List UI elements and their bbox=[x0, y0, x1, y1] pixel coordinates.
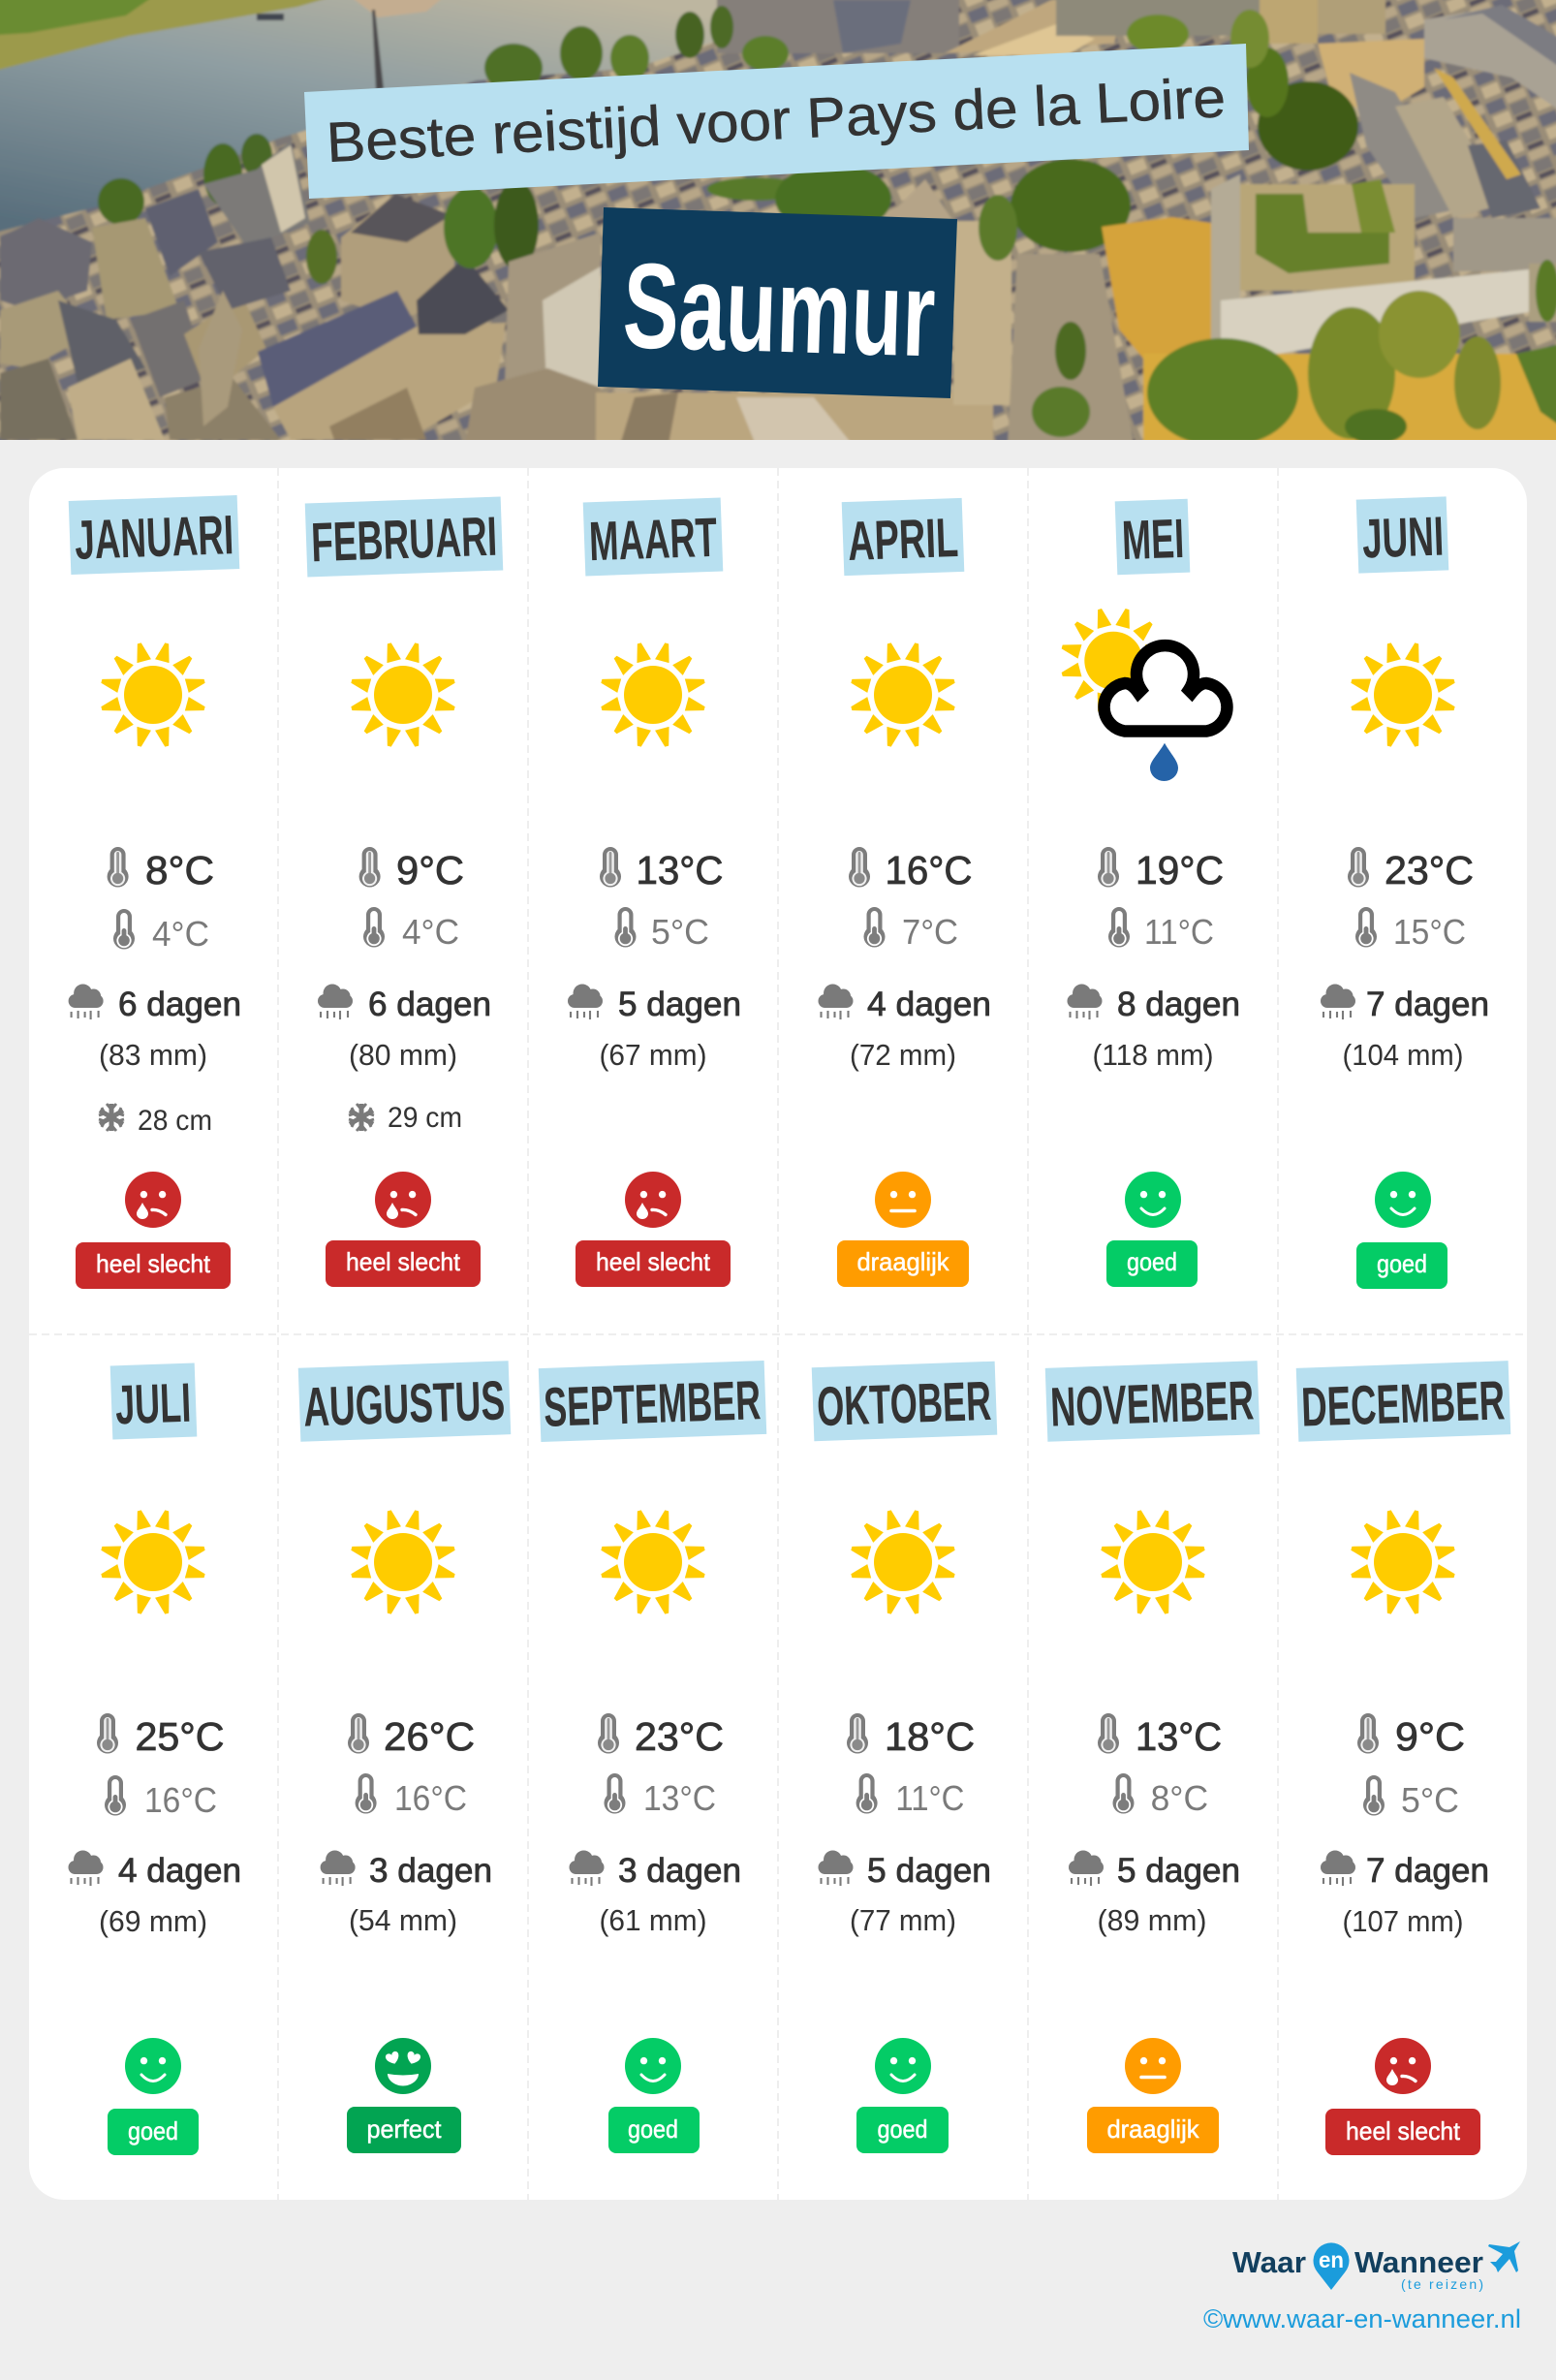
month heading: februari: FEBRUARI bbox=[310, 506, 498, 574]
max temperature: 9°C bbox=[396, 848, 464, 892]
rain days: 4 dagen bbox=[867, 986, 991, 1023]
min temperature bbox=[1108, 907, 1214, 952]
min temperature: 8°C bbox=[1151, 1778, 1208, 1818]
max temperature: 26°C bbox=[384, 1714, 475, 1759]
month heading: augustus: AUGUSTUS bbox=[302, 1369, 506, 1439]
rating badge bbox=[347, 2107, 461, 2153]
rating badge: goed bbox=[628, 2114, 678, 2144]
panel: februari bbox=[305, 496, 503, 1287]
max temperature bbox=[849, 847, 973, 892]
max temperature: 13°C bbox=[636, 848, 723, 892]
rating badge: goed bbox=[878, 2114, 928, 2144]
month heading: maart bbox=[583, 498, 723, 576]
min temperature bbox=[105, 1775, 217, 1820]
precipitation: (89 mm) bbox=[1097, 1903, 1207, 1937]
precipitation: (118 mm) bbox=[1093, 1038, 1213, 1072]
min temperature: 11°C bbox=[895, 1778, 964, 1818]
month heading: januari bbox=[69, 495, 239, 575]
month heading: september: SEPTEMBER bbox=[543, 1369, 762, 1439]
rating badge: perfect bbox=[366, 2114, 442, 2144]
icon: sun bbox=[350, 1509, 456, 1615]
rating badge: goed bbox=[1127, 1247, 1177, 1276]
centre bbox=[504, 233, 602, 380]
rating badge bbox=[1325, 2109, 1480, 2155]
month heading: september bbox=[539, 1361, 766, 1442]
panel: november bbox=[1045, 1361, 1260, 2153]
rain days: 3 dagen bbox=[618, 1852, 741, 1890]
panel: juli bbox=[68, 1362, 241, 2155]
rating badge: heel slecht bbox=[1346, 2116, 1461, 2145]
logo: Waar en Wanneer: (te reizen) bbox=[1401, 2276, 1483, 2292]
month heading: augustus bbox=[298, 1361, 511, 1442]
month heading: juni: JUNI bbox=[1361, 506, 1445, 570]
rating badge: heel slecht bbox=[596, 1247, 711, 1276]
min temperature bbox=[1363, 1775, 1459, 1820]
min temperature: 7°C bbox=[902, 912, 958, 952]
icon: rating face bbox=[625, 2038, 681, 2094]
panel: augustus bbox=[298, 1361, 511, 2153]
rain days: 7 dagen bbox=[1366, 1852, 1489, 1890]
lower right trees and yellow ground bbox=[1143, 354, 1556, 445]
hero photo: aerial view of Saumur bbox=[0, 0, 1556, 447]
fortress walls and hedge bbox=[1209, 173, 1242, 339]
logo: Waar en Wanneer bbox=[1232, 2241, 1520, 2292]
icon: sun bbox=[100, 642, 206, 748]
max temperature bbox=[359, 847, 464, 892]
min temperature bbox=[856, 1773, 964, 1818]
rating badge bbox=[1106, 1240, 1198, 1287]
rating badge: goed bbox=[128, 2116, 178, 2145]
icon: rating face bbox=[875, 2038, 931, 2094]
month heading: juni bbox=[1356, 496, 1448, 574]
icon: rating face bbox=[375, 1172, 431, 1228]
town blocks left bbox=[0, 218, 92, 310]
rating badge bbox=[1087, 2107, 1219, 2153]
icon: rating face bbox=[1375, 2038, 1431, 2094]
rating badge bbox=[608, 2107, 700, 2153]
icon: rating face bbox=[125, 1172, 181, 1228]
max temperature bbox=[348, 1713, 475, 1759]
precipitation: (69 mm) bbox=[99, 1904, 207, 1938]
max temperature: 25°C bbox=[136, 1714, 225, 1759]
max temperature: 13°C bbox=[1136, 1714, 1222, 1759]
icon: sun bbox=[1100, 1509, 1206, 1615]
icon: rating face bbox=[875, 1172, 931, 1228]
rain days bbox=[818, 985, 991, 1023]
min temperature bbox=[356, 1773, 467, 1818]
icon: rating face bbox=[125, 2038, 181, 2094]
icon: sun bbox=[1350, 1509, 1456, 1615]
snow bbox=[349, 1102, 462, 1134]
max temperature bbox=[1348, 847, 1474, 892]
precipitation: (54 mm) bbox=[349, 1903, 457, 1937]
rating badge bbox=[1356, 1242, 1447, 1289]
icon: sun bbox=[1350, 642, 1456, 748]
trees along shore bbox=[482, 43, 545, 83]
rain days bbox=[321, 1851, 492, 1890]
max temperature: 23°C bbox=[1385, 848, 1474, 892]
month heading: juli: JULI bbox=[114, 1372, 192, 1436]
rain days bbox=[318, 985, 491, 1023]
max temperature bbox=[1098, 847, 1224, 892]
logo: Waar en Wanneer: Waar bbox=[1232, 2245, 1306, 2279]
precipitation: (80 mm) bbox=[349, 1038, 457, 1072]
banner: Beste reistijd voor Pays de la Loire bbox=[304, 44, 1249, 199]
rain days: 5 dagen bbox=[1117, 1852, 1240, 1890]
church bbox=[339, 211, 456, 316]
icon: rating face bbox=[1125, 1172, 1181, 1228]
max temperature bbox=[598, 1713, 724, 1759]
rain days bbox=[68, 1851, 241, 1890]
icon: sun bbox=[350, 642, 456, 748]
panel: juni bbox=[1321, 496, 1489, 1289]
top town and castle bbox=[717, 0, 959, 53]
banner: Saumur bbox=[598, 207, 957, 398]
icon: sun bbox=[100, 1509, 206, 1615]
min temperature bbox=[614, 907, 709, 952]
logo: Waar en Wanneer: Wanneer bbox=[1354, 2245, 1483, 2279]
rating badge: goed bbox=[1377, 1249, 1427, 1278]
max temperature: 18°C bbox=[885, 1714, 975, 1759]
precipitation: (67 mm) bbox=[599, 1038, 707, 1072]
rain days: 6 dagen bbox=[368, 986, 491, 1023]
rating badge: heel slecht bbox=[96, 1249, 211, 1278]
panel: oktober bbox=[812, 1362, 997, 2153]
banner: Saumur: Saumur bbox=[621, 238, 937, 383]
max temperature bbox=[600, 847, 723, 892]
icon: sun bbox=[850, 1509, 956, 1615]
month heading: januari: JANUARI bbox=[74, 504, 234, 572]
panel: april bbox=[818, 498, 991, 1287]
min temperature bbox=[1355, 907, 1466, 952]
month heading: juli bbox=[110, 1362, 197, 1439]
rating badge: draaglijk bbox=[1106, 2114, 1199, 2144]
min temperature: 4°C bbox=[152, 914, 209, 954]
max temperature bbox=[847, 1713, 975, 1759]
rain days: 6 dagen bbox=[118, 986, 241, 1023]
icon: map pin with en: en bbox=[1319, 2247, 1344, 2272]
precipitation: (72 mm) bbox=[850, 1038, 956, 1072]
min temperature bbox=[864, 907, 958, 952]
min temperature: 4°C bbox=[402, 912, 459, 952]
snow bbox=[99, 1104, 212, 1137]
icon: sun bbox=[600, 642, 706, 748]
icon: rating face bbox=[375, 2038, 431, 2094]
website credit: ©www.waar-en-wanneer.nl bbox=[1203, 2304, 1521, 2333]
month heading: oktober bbox=[812, 1362, 997, 1441]
month heading: november bbox=[1045, 1361, 1260, 1442]
max temperature bbox=[97, 1713, 225, 1759]
rating badge: heel slecht bbox=[346, 1247, 461, 1276]
month heading: februari bbox=[305, 496, 503, 578]
rain days bbox=[568, 985, 741, 1023]
rain days: 4 dagen bbox=[118, 1852, 241, 1890]
rain days: 5 dagen bbox=[618, 986, 741, 1023]
rain days: 5 dagen bbox=[867, 1852, 991, 1890]
rating badge bbox=[837, 1240, 969, 1287]
min temperature: 16°C bbox=[144, 1780, 217, 1820]
panel: climate calendar card bbox=[29, 468, 1527, 2200]
rain days bbox=[1068, 985, 1240, 1023]
rating badge bbox=[856, 2107, 949, 2153]
max temperature: 16°C bbox=[886, 848, 973, 892]
min temperature bbox=[605, 1773, 716, 1818]
precipitation: (104 mm) bbox=[1343, 1038, 1463, 1072]
rating badge bbox=[108, 2109, 199, 2155]
rating badge bbox=[326, 1240, 481, 1287]
rating badge bbox=[76, 1242, 231, 1289]
month heading: mei bbox=[1115, 499, 1190, 575]
snow: 28 cm bbox=[138, 1105, 212, 1137]
max temperature: 9°C bbox=[1395, 1714, 1465, 1759]
rain days: 8 dagen bbox=[1117, 986, 1240, 1023]
min temperature bbox=[363, 907, 459, 952]
min temperature: 5°C bbox=[1401, 1780, 1459, 1820]
rain days bbox=[818, 1851, 991, 1890]
icon: sun bbox=[850, 642, 956, 748]
rain days bbox=[570, 1851, 741, 1890]
icon: rating face bbox=[1125, 2038, 1181, 2094]
precipitation: (107 mm) bbox=[1343, 1904, 1463, 1938]
precipitation: (61 mm) bbox=[599, 1903, 707, 1937]
rain days: 7 dagen bbox=[1366, 986, 1489, 1023]
month heading: april: APRIL bbox=[847, 507, 959, 573]
min temperature: 15°C bbox=[1393, 912, 1466, 952]
max temperature bbox=[1357, 1713, 1465, 1759]
icon: map pin with en bbox=[1314, 2242, 1349, 2290]
max temperature bbox=[1098, 1713, 1222, 1759]
snow: 29 cm bbox=[388, 1102, 462, 1134]
rating badge: draaglijk bbox=[856, 1247, 949, 1276]
min temperature: 13°C bbox=[643, 1778, 716, 1818]
icon: rating face bbox=[1375, 1172, 1431, 1228]
month heading: maart: MAART bbox=[588, 507, 718, 573]
rain days bbox=[1069, 1851, 1240, 1890]
max temperature bbox=[108, 847, 214, 892]
panel: maart bbox=[568, 498, 741, 1287]
icon: rating face bbox=[625, 1172, 681, 1228]
panel: mei bbox=[1060, 499, 1240, 1287]
min temperature bbox=[1112, 1773, 1208, 1818]
rain days: 3 dagen bbox=[369, 1852, 492, 1890]
icon: sun bbox=[600, 1509, 706, 1615]
max temperature: 23°C bbox=[635, 1714, 724, 1759]
rating badge bbox=[576, 1240, 731, 1287]
min temperature: 16°C bbox=[394, 1778, 467, 1818]
panel: december bbox=[1296, 1361, 1510, 2155]
month heading: april bbox=[842, 498, 964, 576]
month heading: mei: MEI bbox=[1121, 508, 1185, 572]
month heading: november: NOVEMBER bbox=[1049, 1369, 1255, 1439]
min temperature bbox=[113, 909, 209, 954]
banner: Beste reistijd voor Pays de la Loire: Beste reistijd voor Pays de la Loire bbox=[325, 66, 1227, 174]
min temperature: 5°C bbox=[651, 912, 709, 952]
panel: januari bbox=[69, 495, 241, 1289]
precipitation: (83 mm) bbox=[99, 1038, 207, 1072]
max temperature: 8°C bbox=[145, 848, 214, 892]
icon: sun behind cloud with rain drop bbox=[1060, 608, 1227, 781]
max temperature: 19°C bbox=[1136, 848, 1224, 892]
precipitation: (77 mm) bbox=[850, 1903, 956, 1937]
month heading: oktober: OKTOBER bbox=[816, 1370, 992, 1438]
icon: airplane bbox=[1488, 2241, 1520, 2272]
rain days bbox=[69, 985, 241, 1023]
min temperature: 11°C bbox=[1144, 912, 1214, 952]
panel: september bbox=[539, 1361, 766, 2153]
